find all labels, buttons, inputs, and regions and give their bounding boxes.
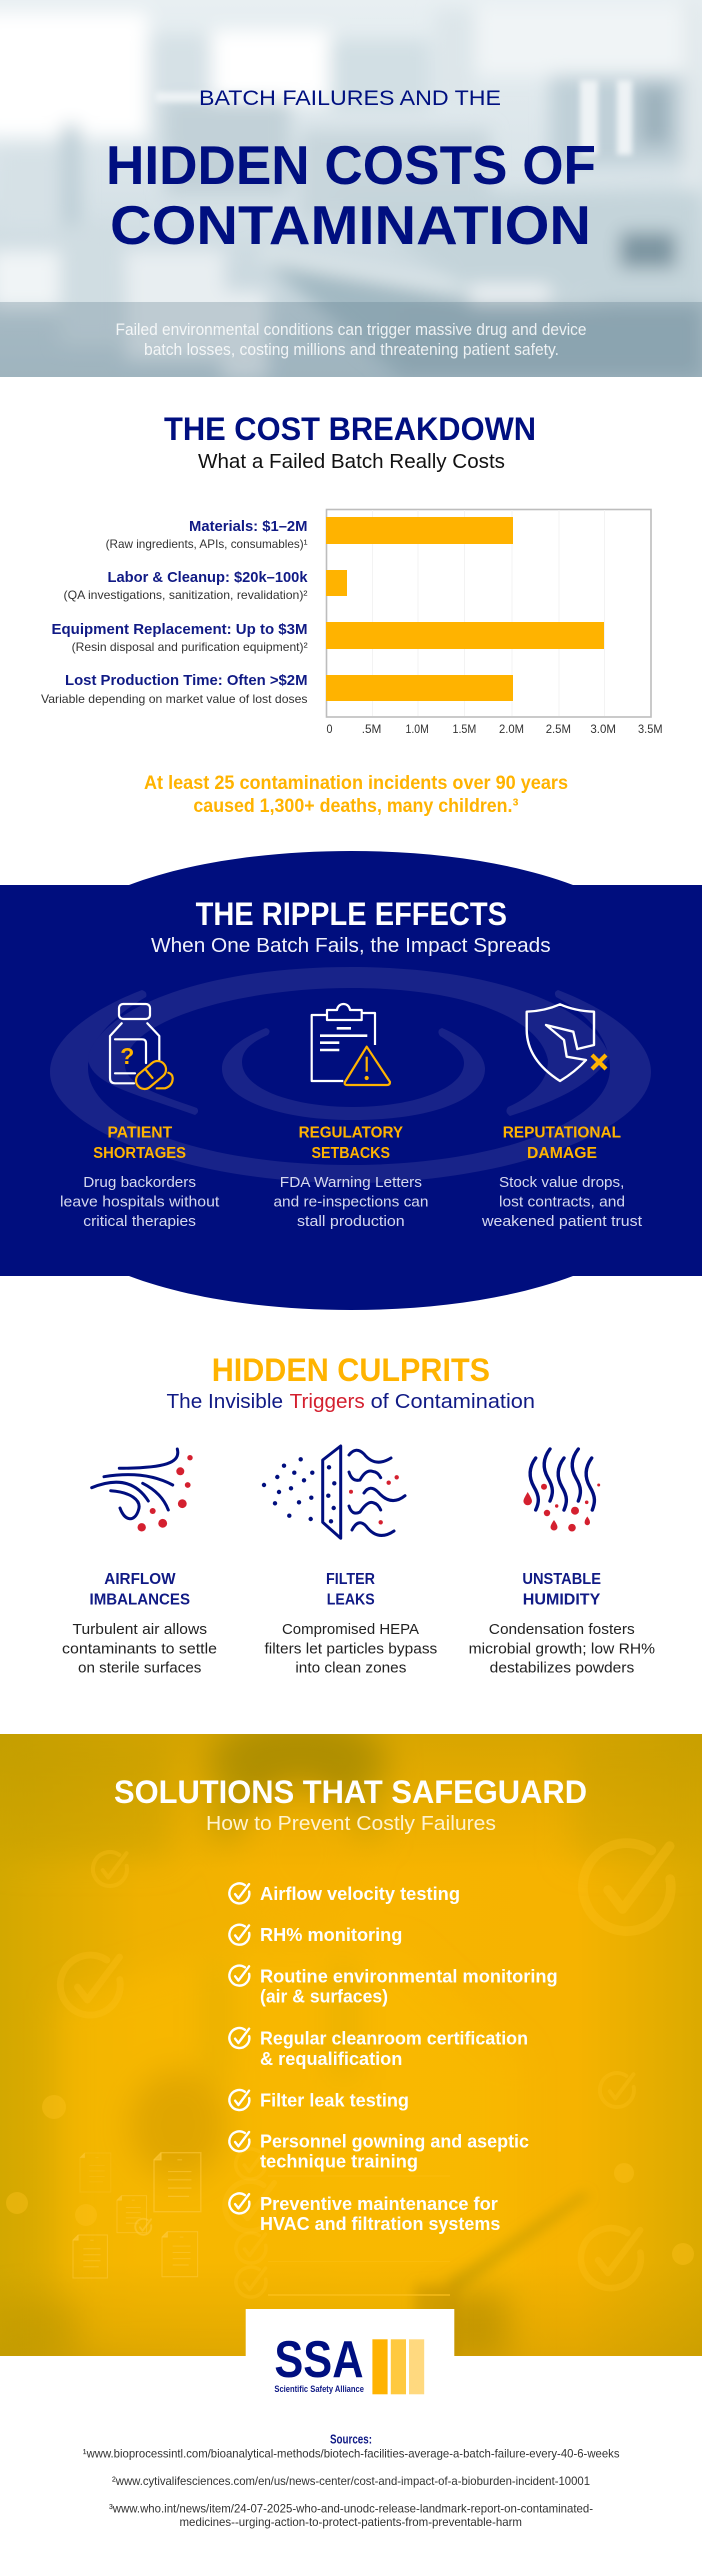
checklist text: HVAC and filtration systems — [260, 2214, 500, 2234]
checklist text: (air & surfaces) — [260, 1986, 388, 2006]
icon: clipboard with warning — [312, 1004, 390, 1085]
subheading: what a failed batch really costs: What a Failed Batch Really Costs — [198, 450, 505, 473]
sources: ¹www.bioprocessintl.com/bioanalytical-methods/biotech-facilities-average-a-batch-failure-every-40-6-weeks — [83, 2447, 620, 2461]
chart axis labels: 3.0M — [590, 722, 616, 736]
chart category labels: Materials: $1–2M — [189, 518, 308, 535]
item: filter leaks — [264, 1571, 437, 1677]
chart axis labels: 3.5M — [638, 722, 662, 736]
navy bulged band — [0, 851, 702, 1310]
bar: lost production time — [326, 675, 513, 701]
item: reputational damage: DAMAGE — [527, 1145, 597, 1162]
item: airflow imbalances: contaminants to settle — [62, 1640, 217, 1658]
heading: the cost breakdown: THE COST BREAKDOWN — [164, 411, 536, 447]
item: regulatory setbacks: stall production — [297, 1213, 405, 1230]
checklist text: technique training — [260, 2152, 418, 2172]
icon: medicine bottle and pills — [110, 1004, 173, 1092]
logo: Scientific Safety Alliance — [246, 2309, 454, 2395]
item: filter leaks: Compromised HEPA — [282, 1621, 419, 1638]
item: filter leaks: into clean zones — [295, 1660, 406, 1677]
item: reputational damage: REPUTATIONAL — [503, 1124, 621, 1142]
check icons — [229, 1883, 249, 2213]
item: patient shortages: leave hospitals without — [60, 1194, 220, 1210]
panel: solutions — [0, 1715, 702, 2360]
logo: Scientific Safety Alliance: SSA — [274, 2331, 364, 2389]
sources — [83, 2433, 620, 2529]
item: reputational damage: lost contracts, and — [499, 1194, 625, 1210]
heading: the ripple effects: THE RIPPLE EFFECTS — [196, 896, 507, 932]
chart axis labels: 1.5M — [452, 722, 476, 736]
item: filter leaks: filters let particles bypass — [264, 1640, 437, 1658]
chart category labels: (QA investigations, sanitization, revalidation)² — [64, 588, 308, 602]
item: patient shortages: PATIENT — [108, 1124, 172, 1142]
icons: faint medical documents — [73, 2153, 201, 2278]
icon: medicine bottle and pills: ? — [120, 1043, 134, 1069]
hero background photo (blurred laboratory) — [0, 0, 702, 380]
item: regulatory setbacks: and re-inspections can — [274, 1194, 428, 1210]
item: patient shortages — [60, 1124, 220, 1230]
item: patient shortages: Drug backorders — [83, 1174, 196, 1191]
item: reputational damage — [481, 1124, 643, 1230]
panel: cost breakdown — [41, 411, 662, 817]
icon: filter leak — [262, 1446, 405, 1538]
callout: contamination deaths: At least 25 contamination incidents over 90 years — [144, 772, 568, 794]
sources: Sources: — [330, 2433, 372, 2447]
item: filter leaks: LEAKS — [327, 1592, 375, 1608]
checklist text: Preventive maintenance for — [260, 2194, 498, 2214]
chart axis labels: .5M — [362, 722, 381, 736]
hero subtitle: batch losses, costing millions and threatening patient safety. — [144, 341, 559, 359]
bar: labor and cleanup — [326, 570, 347, 596]
solutions background photo (blurred doctor) — [0, 1715, 702, 2360]
checklist text — [260, 1884, 558, 2234]
checklist text: Personnel gowning and aseptic — [260, 2132, 529, 2152]
checklist text: RH% monitoring — [260, 1925, 402, 1945]
bar: materials — [326, 517, 513, 544]
sources: ³www.who.int/news/item/24-07-2025-who-and-unodc-release-landmark-report-on-contaminated- — [109, 2501, 593, 2515]
callout: contamination deaths: caused 1,300+ deaths, many children.³ — [193, 795, 519, 817]
bar: equipment replacement — [326, 622, 604, 649]
item: regulatory setbacks — [274, 1124, 428, 1230]
item: airflow imbalances: IMBALANCES — [90, 1592, 190, 1608]
sources: medicines--urging-action-to-protect-patients-from-preventable-harm — [180, 2515, 522, 2529]
chart category labels — [41, 518, 308, 706]
item: unstable humidity: UNSTABLE — [522, 1571, 601, 1588]
heading: hidden culprits: HIDDEN CULPRITS — [212, 1352, 490, 1388]
logo: Scientific Safety Alliance: Scientific Safety Alliance — [274, 2384, 364, 2395]
sources: ²www.cytivalifesciences.com/en/us/news-center/cost-and-impact-of-a-bioburden-incident-10001 — [112, 2474, 590, 2488]
subheading: invisible triggers: The Invisible — [166, 1390, 283, 1413]
chart axis labels: 2.5M — [546, 722, 571, 736]
checklist — [229, 1883, 558, 2234]
chart category labels: Lost Production Time: Often >$2M — [65, 672, 308, 689]
chart category labels: (Resin disposal and purification equipment)² — [72, 640, 308, 654]
chart axis labels: 1.0M — [406, 722, 429, 736]
item: airflow imbalances: AIRFLOW — [104, 1571, 176, 1588]
icon: humidity — [523, 1449, 600, 1531]
main title: HIDDEN COSTS OF — [106, 134, 596, 196]
callout: contamination deaths — [144, 772, 568, 817]
bar chart — [41, 510, 662, 736]
item: filter leaks: FILTER — [326, 1571, 375, 1588]
chart axis labels — [326, 722, 662, 736]
subtitle band — [0, 302, 702, 377]
chart category labels: (Raw ingredients, APIs, consumables)¹ — [106, 537, 308, 551]
item: airflow imbalances: on sterile surfaces — [78, 1660, 201, 1677]
hero subtitle — [116, 321, 586, 359]
kicker heading: BATCH FAILURES AND THE — [199, 87, 501, 110]
ripple rings — [50, 967, 651, 1183]
item: reputational damage: Stock value drops, — [499, 1174, 624, 1191]
item: unstable humidity: Condensation fosters — [489, 1621, 635, 1638]
item: reputational damage: weakened patient trust — [481, 1213, 643, 1230]
chart axis labels: 2.0M — [499, 722, 524, 736]
hero subtitle: Failed environmental conditions can trigger massive drug and device — [116, 321, 586, 339]
item: airflow imbalances — [62, 1571, 217, 1677]
checklist text: & requalification — [260, 2049, 402, 2069]
chart axis labels: 0 — [326, 722, 333, 736]
item: patient shortages: critical therapies — [83, 1213, 196, 1230]
subheading: invisible triggers — [166, 1390, 535, 1413]
item: unstable humidity: HUMIDITY — [523, 1592, 601, 1608]
chart category labels: Variable depending on market value of lost doses — [41, 692, 308, 706]
subheading: how to prevent costly failures: How to Prevent Costly Failures — [206, 1813, 496, 1835]
item: regulatory setbacks: REGULATORY — [299, 1124, 403, 1142]
icon: cracked shield — [527, 1004, 606, 1081]
subheading: invisible triggers: of Contamination — [371, 1390, 535, 1413]
panel: ripple effects — [0, 851, 702, 1310]
item: regulatory setbacks: SETBACKS — [312, 1145, 390, 1162]
checklist text: Airflow velocity testing — [260, 1884, 460, 1904]
item: airflow imbalances: Turbulent air allows — [72, 1621, 207, 1638]
subheading: invisible triggers: Triggers — [290, 1390, 365, 1413]
item: patient shortages: SHORTAGES — [93, 1145, 186, 1162]
item: unstable humidity: destabilizes powders — [490, 1660, 634, 1677]
checklist text: Routine environmental monitoring — [260, 1966, 558, 1986]
chart category labels: Equipment Replacement: Up to $3M — [52, 621, 308, 638]
main title — [106, 134, 596, 256]
subheading: when one batch fails: When One Batch Fails, the Impact Spreads — [151, 934, 551, 957]
panel: hero header — [0, 0, 702, 380]
checklist text: Regular cleanroom certification — [260, 2028, 528, 2048]
icon: airflow — [92, 1449, 193, 1532]
item: regulatory setbacks: FDA Warning Letters — [280, 1174, 422, 1191]
checklist text: Filter leak testing — [260, 2090, 409, 2110]
item: unstable humidity: microbial growth; low RH% — [469, 1640, 655, 1658]
chart category labels: Labor & Cleanup: $20k–100k — [108, 569, 308, 586]
item: unstable humidity — [469, 1571, 655, 1677]
heading: solutions that safeguard: SOLUTIONS THAT SAFEGUARD — [114, 1774, 587, 1810]
main title: CONTAMINATION — [110, 194, 591, 256]
panel: hidden culprits — [62, 1352, 655, 1677]
